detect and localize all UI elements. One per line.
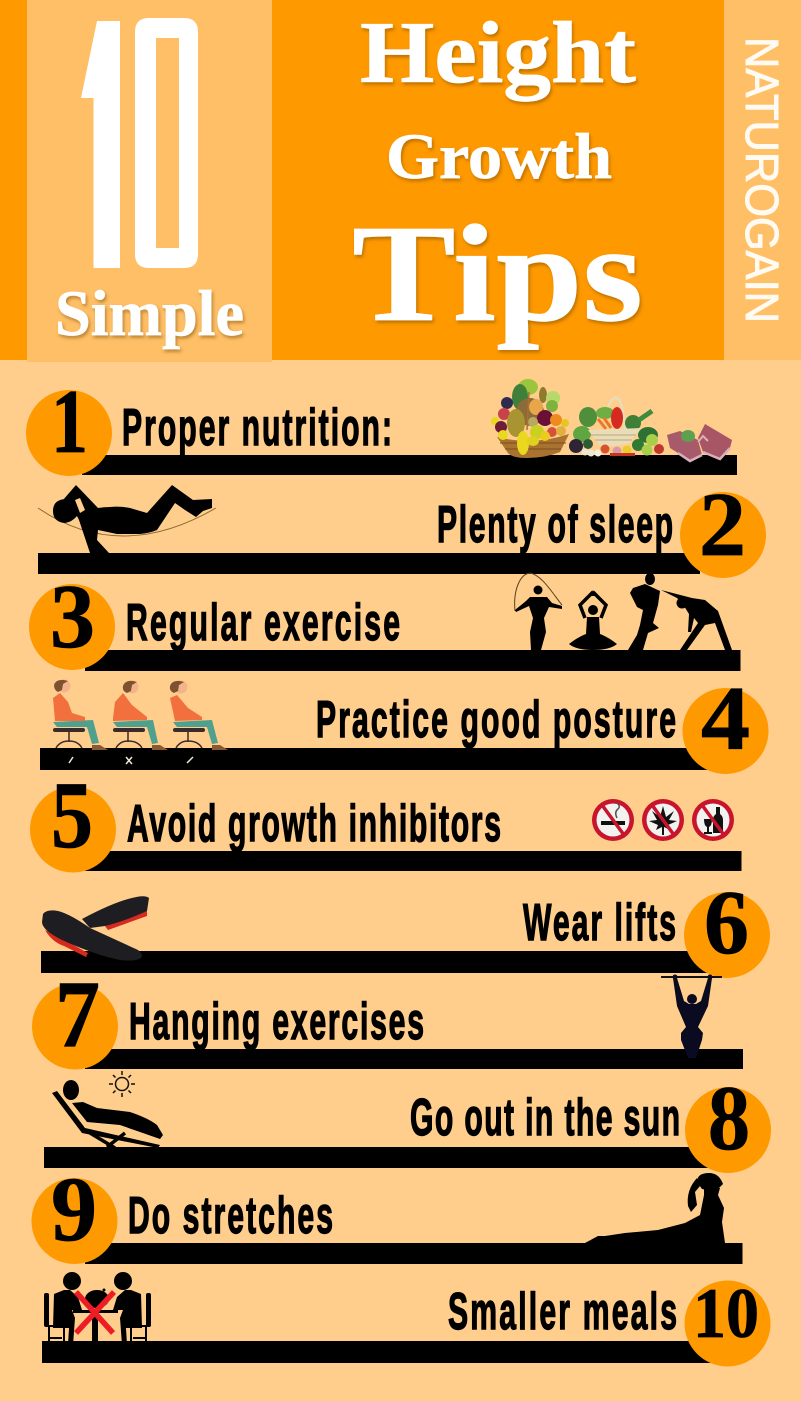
tip 5 number badge [30,762,116,872]
tip 8 bar [44,1147,714,1168]
icon: no alcohol sign [692,799,734,841]
heading: Simple: Simple [55,278,244,350]
heading: Growth: Growth [386,121,612,193]
large numeral 10 [81,18,198,268]
figure one [53,680,108,750]
tip 3 bar [85,650,740,671]
tip 1 number badge [26,371,112,476]
tip 5 number badge: 5 [51,762,93,868]
tip 2 number badge: 2 [699,474,746,575]
tip 1 number badge: 1 [51,371,88,472]
tip 9 number badge: 9 [51,1158,97,1260]
tip 2 bar [38,553,700,574]
tip 2 label: Plenty of sleep [437,497,673,554]
icon: cobra stretch figure [585,1173,725,1243]
tip 6 label: Wear lifts [523,895,676,952]
icon: no smoking sign [592,799,634,841]
tip 6 bar [41,951,711,973]
figure two [113,680,168,750]
tip 4 number badge [682,668,768,774]
tip 3 label: Regular exercise [126,595,400,652]
tip 8 number badge [685,1067,771,1173]
tip 6 number badge [684,872,770,978]
tip 7 bar [85,1049,743,1069]
heading: Height: Height [360,5,636,102]
tip 3 number badge [29,566,115,670]
icon: vegetable basket [569,398,664,456]
icon: no cannabis sign [642,799,684,841]
icon: running figure [628,573,660,650]
brand: NATUROGAIN: NATUROGAIN [736,37,788,323]
figure three [170,680,228,750]
tip 4 number badge: 4 [701,668,750,769]
tip 1 label: Proper nutrition: [122,400,392,457]
posture marks on bar [69,757,193,764]
tip 10 bar [42,1341,712,1363]
tip 8 label: Go out in the sun [410,1090,680,1147]
tip 1 bar [82,455,737,475]
tip 7 number badge: 7 [55,961,100,1067]
icon: people at table with red cross [44,1272,151,1346]
tip 9 bar [85,1243,742,1264]
icon: sun [109,1071,135,1097]
icon: jump rope figure [515,573,562,650]
tip 4 bar [40,748,710,770]
icon: hanging exercise figure [661,974,722,1058]
tip 7 number badge [32,961,118,1070]
tip 5 bar [85,851,742,871]
tip 10 label: Smaller meals [448,1284,677,1341]
tip 2 number badge [680,474,766,578]
icon: side stretch figure [661,590,732,650]
header band [0,0,801,362]
icon: height insoles [42,896,149,961]
icon: person in hammock [38,485,216,553]
tip 7 label: Hanging exercises [129,994,424,1051]
tip 9 number badge [32,1158,118,1264]
tip 3 number badge: 3 [50,566,95,667]
tip 10 number badge: 10 [693,1275,759,1353]
tip 8 number badge: 8 [708,1067,750,1169]
tip 4 label: Practice good posture [316,692,676,749]
icon: person on sun lounger [52,1080,163,1148]
icon: seated posture figures [53,680,228,750]
tip 9 label: Do stretches [128,1188,333,1245]
tip 6 number badge: 6 [704,872,749,973]
icon: raw meat [667,424,732,461]
heading: Tips: Tips [352,197,643,351]
icon: fruit basket [491,379,569,458]
icon: seated yoga figure [569,590,617,650]
tip 5 label: Avoid growth inhibitors [127,796,501,853]
